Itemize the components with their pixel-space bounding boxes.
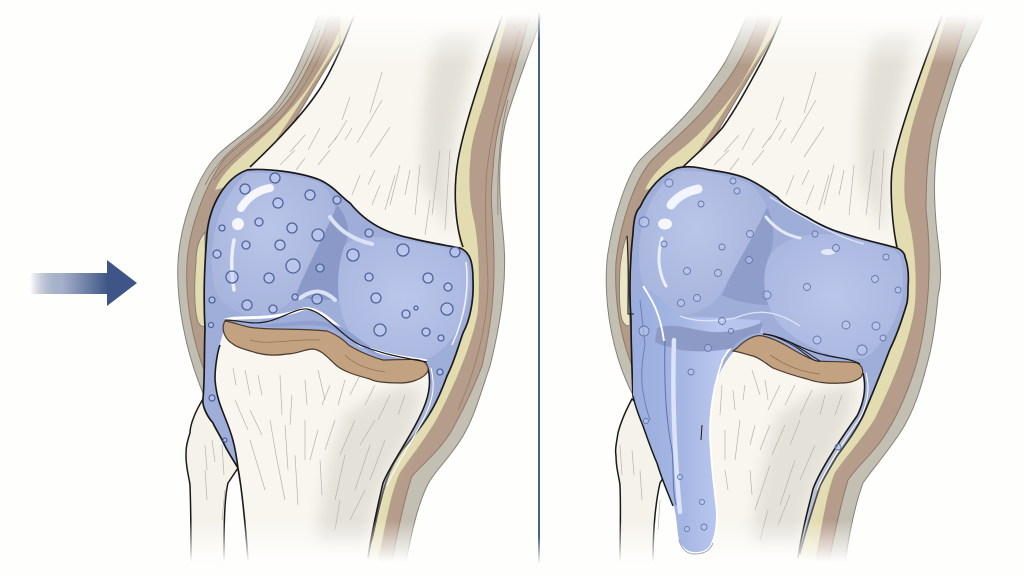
tibia bone <box>620 348 868 562</box>
left soft tissue layers, back of thigh <box>178 8 362 393</box>
panel: left knee, normal joint <box>178 8 545 562</box>
synovial fluid capsule <box>630 167 908 553</box>
fibula bone <box>186 399 238 562</box>
right soft tissue layers <box>780 8 987 562</box>
dark band across the fluid <box>655 322 763 351</box>
left condyle lobe <box>212 173 337 315</box>
tibial cartilage <box>223 309 428 383</box>
tibial cartilage <box>733 334 863 383</box>
fluid bubbles <box>639 178 901 532</box>
highlights <box>671 189 698 205</box>
right soft tissue layers <box>340 8 545 562</box>
tibia bone <box>205 333 433 562</box>
white edge of the left condyle <box>643 286 664 341</box>
fluid bubbles <box>208 173 460 442</box>
femur bone <box>683 8 945 260</box>
synovial fluid capsule <box>203 169 473 556</box>
dark wedge between lobes <box>722 207 773 305</box>
left soft tissue layers <box>606 8 790 393</box>
right condyle lobe <box>764 234 903 359</box>
fluid pouch descending over the tibia <box>627 236 800 554</box>
fibula bone <box>616 399 668 562</box>
femur bone <box>250 8 505 260</box>
dark wedge between lobes <box>296 205 348 300</box>
right condyle lobe <box>338 237 470 359</box>
left condyle lobe <box>639 171 767 315</box>
highlights <box>241 188 270 208</box>
divider line <box>538 12 540 564</box>
arrow pointing to left knee <box>30 260 137 306</box>
